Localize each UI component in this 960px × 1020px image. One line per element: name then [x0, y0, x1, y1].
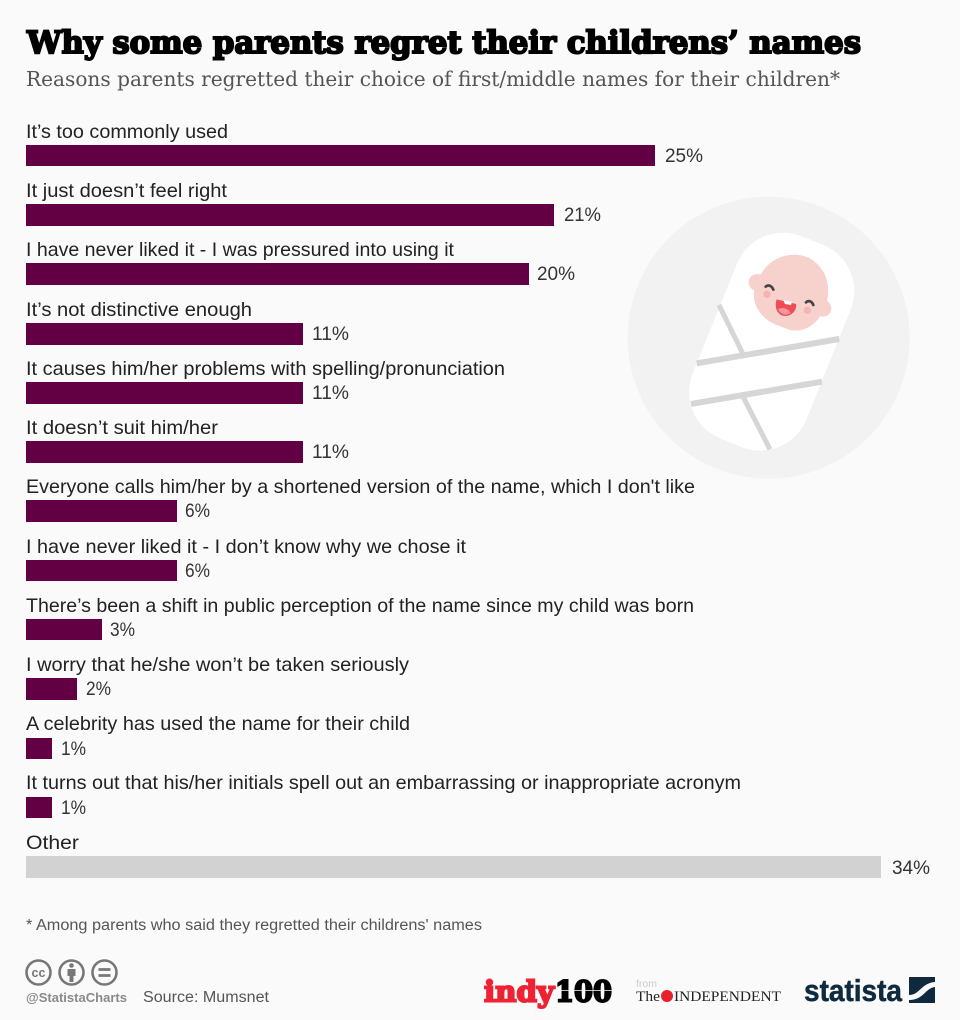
- icon: creative commons licence: [26, 960, 116, 984]
- bar: taken seriously: I worry that he/she won’t be taken seriously: [26, 654, 409, 676]
- logo: The Independent: The: [636, 989, 660, 1005]
- bar: too commonly used: 25%: [665, 145, 703, 167]
- bar: shortened: Everyone calls him/her by a shortened version of the name, which I don't like: [26, 476, 695, 498]
- bar: not distinctive: [26, 299, 349, 345]
- bar: too commonly used: [26, 121, 703, 167]
- bar: other: Other: [26, 832, 80, 854]
- bar: shortened: 6%: [185, 500, 210, 522]
- bar: other: [26, 832, 930, 879]
- logo: The Independent: [636, 979, 781, 1005]
- bar: pressured: [26, 239, 575, 285]
- logo: The Independent: INDEPENDENT: [674, 989, 781, 1005]
- logo: indy100: 100: [555, 974, 612, 1008]
- bar: acronym: 1%: [61, 797, 86, 819]
- bar: doesn't feel right: 21%: [564, 204, 601, 226]
- bar: pressured: 20%: [537, 263, 575, 285]
- bar: taken seriously: [26, 654, 409, 700]
- bar: acronym: [26, 772, 741, 819]
- footnote: * Among parents who said they regretted their childrens' names: [26, 917, 482, 934]
- logo: indy100: [484, 974, 612, 1008]
- bar: spelling: It causes him/her problems with spelling/pronunciation: [26, 358, 505, 380]
- bar: not distinctive: It’s not distinctive enough: [26, 299, 252, 321]
- bar: acronym: It turns out that his/her initials spell out an embarrassing or inappropriate acronym: [26, 772, 741, 794]
- logo: Statista: statista: [804, 973, 903, 1008]
- bar: shortened: [26, 476, 695, 522]
- bar: public perception: 3%: [110, 619, 135, 641]
- bar: celebrity: 1%: [61, 738, 86, 760]
- bar: celebrity: [26, 713, 410, 760]
- logo: indy100: indy: [484, 974, 555, 1008]
- credit handle: @StatistaCharts: [26, 991, 127, 1005]
- bar: spelling: 11%: [312, 382, 349, 404]
- bar: public perception: There’s been a shift in public perception of the name since my child was born: [26, 595, 694, 617]
- bar: pressured: I have never liked it - I was pressured into using it: [26, 239, 455, 261]
- icon: creative commons licence: cc: [32, 966, 45, 980]
- bar: doesn't feel right: It just doesn’t feel right: [26, 180, 228, 202]
- bar: doesn't suit: 11%: [312, 441, 349, 463]
- subtitle: Reasons parents regretted their choice of first/middle names for their children*: [26, 67, 840, 91]
- source: Source: Mumsnet: [143, 989, 270, 1006]
- bar: taken seriously: 2%: [86, 678, 111, 700]
- bar: doesn't suit: [26, 417, 349, 463]
- bar: doesn't suit: It doesn’t suit him/her: [26, 417, 219, 439]
- bar: not distinctive: 11%: [312, 323, 349, 345]
- logo: The Independent: from: [636, 979, 657, 990]
- bar: celebrity: A celebrity has used the name for their child: [26, 713, 410, 735]
- bar: doesn't feel right: [26, 180, 601, 226]
- bar: other: 34%: [892, 857, 930, 879]
- bar: public perception: [26, 595, 694, 641]
- bar: too commonly used: It’s too commonly used: [26, 121, 228, 143]
- illustration: swaddled baby: [628, 197, 910, 479]
- bar: spelling: [26, 358, 505, 404]
- bar: don't know why: I have never liked it - I don’t know why we chose it: [26, 536, 467, 558]
- bar: don't know why: [26, 536, 467, 582]
- title: Why some parents regret their childrens’ names: [26, 25, 861, 61]
- bar: don't know why: 6%: [185, 560, 210, 582]
